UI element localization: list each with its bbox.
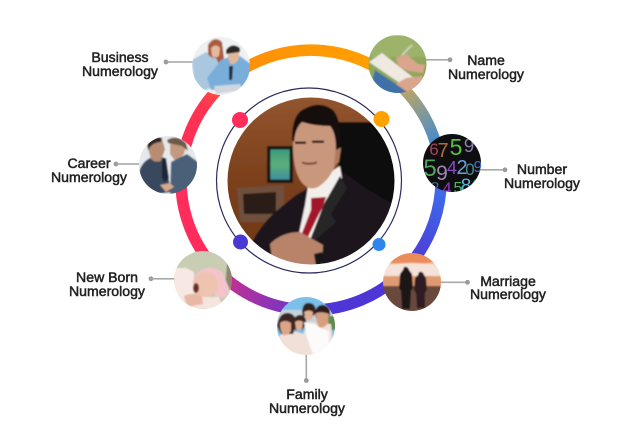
item: Business Numerology (82, 35, 253, 97)
item: Marriage Numerology: Marriage (480, 273, 536, 289)
item: Family Numerology: Family (286, 386, 329, 402)
item: Business Numerology: Business (91, 49, 149, 65)
item: Marriage Numerology: Numerology (470, 286, 547, 302)
item: New Born Numerology: New Born (76, 269, 138, 285)
item: Family Numerology (269, 296, 346, 416)
item: Career Numerology (51, 135, 198, 196)
thin inner ring (216, 88, 402, 273)
item: Number Numerology: 7 (437, 140, 449, 162)
item: New Born Numerology (69, 250, 233, 310)
item: Name Numerology (368, 35, 525, 98)
accent dot: orange (374, 111, 390, 127)
item: Marriage Numerology (382, 252, 547, 312)
item: Number Numerology (423, 134, 580, 192)
item: Number Numerology: Number (517, 161, 567, 177)
item: Name Numerology: Numerology (448, 66, 525, 82)
item: Number Numerology: 8 (461, 176, 471, 197)
gradient ring (181, 50, 441, 310)
item: Career Numerology: Numerology (51, 169, 128, 185)
item: Number Numerology: 4 (447, 158, 457, 178)
item: Number Numerology: 9 (464, 136, 474, 157)
item: Number Numerology: 5 (450, 134, 462, 160)
item: Number Numerology: Numerology (504, 175, 581, 191)
item: Number Numerology: 0 (465, 160, 475, 179)
item: Number Numerology: 4 (442, 179, 452, 198)
item: Number Numerology: 4 (470, 176, 478, 192)
item: Number Numerology: 5 (454, 180, 463, 197)
central portrait photo (225, 95, 400, 272)
item: Name Numerology: Name (467, 52, 505, 68)
accent dot: purple (233, 234, 248, 250)
item: Number Numerology: 9 (474, 159, 483, 176)
item: Number Numerology: 9 (436, 162, 448, 185)
accent dot: red (232, 112, 248, 128)
item: Number Numerology: 2 (456, 157, 468, 179)
item: Number Numerology: 5 (423, 155, 437, 182)
accent dot: blue (372, 238, 386, 251)
item: New Born Numerology: Numerology (69, 283, 146, 299)
item: Number Numerology: 2 (431, 180, 440, 197)
item: Career Numerology: Career (67, 155, 111, 171)
item: Family Numerology: Numerology (269, 400, 346, 416)
item: Number Numerology: 6 (429, 140, 439, 159)
item: Business Numerology: Numerology (82, 63, 159, 79)
